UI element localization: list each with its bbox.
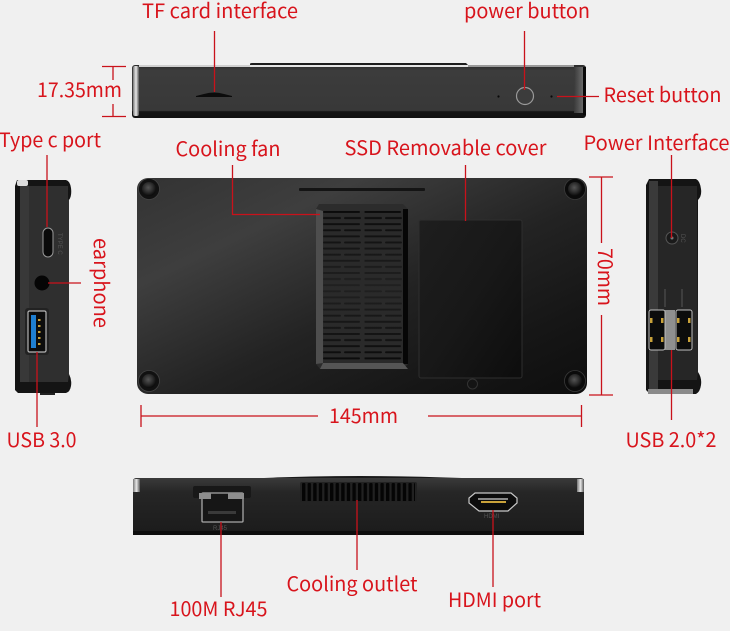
- callout line: TF card: [214, 31, 216, 92]
- callout line: cooling outlet: [356, 500, 358, 570]
- icon: DC power jack: [666, 232, 678, 244]
- fan grille: [316, 204, 408, 369]
- device: bottom view: [137, 178, 587, 394]
- label: Reset button: Reset button: [604, 79, 722, 108]
- foot: top right: [564, 178, 586, 200]
- device: left side view: TYPE C: [56, 233, 62, 255]
- dimension: depth: [589, 177, 613, 395]
- device: right side view: [646, 179, 701, 394]
- icon: USB 2.0 ports: [649, 289, 692, 350]
- vent slot: [299, 188, 425, 191]
- label: HDMI port: HDMI port: [448, 584, 541, 613]
- dimension: height: [102, 66, 126, 116]
- icon: TF card slot: [196, 92, 232, 97]
- SSD removable cover: [419, 220, 522, 389]
- icon: HDMI port: [469, 493, 517, 511]
- icon: reset hole: [550, 95, 553, 98]
- device: right side view: DC: [679, 234, 685, 243]
- device: rear edge view: HDMI: [484, 514, 500, 520]
- icon: indicator hole: [497, 95, 500, 98]
- icon: USB-C port: [43, 228, 53, 257]
- callout line: RJ45: [220, 522, 222, 597]
- device: left side view: [15, 180, 71, 395]
- foot: top left: [138, 178, 160, 200]
- callout line: USB 2.0: [670, 350, 672, 420]
- label: Type c port: Type c port: [0, 124, 101, 153]
- dimension: width: [141, 405, 582, 427]
- callout line: power button: [524, 31, 526, 90]
- label: Power Interface: Power Interface: [584, 127, 730, 156]
- callout line: cooling fan: [232, 165, 320, 214]
- callout line: SSD cover: [464, 165, 466, 221]
- callout line: earphone: [48, 282, 81, 284]
- label: 70mm: 70mm: [592, 248, 621, 306]
- label: USB 2.0*2: USB 2.0*2: [626, 424, 716, 453]
- icon: earphone jack: [34, 276, 50, 290]
- device: top edge view: [132, 63, 586, 118]
- icon: cooling outlet vents: [300, 482, 417, 502]
- callout line: HDMI: [492, 510, 494, 587]
- label: SSD Removable cover: SSD Removable cover: [344, 132, 547, 161]
- foot: bottom right: [564, 370, 586, 392]
- icon: power button: [516, 88, 534, 104]
- callout line: power interface: [670, 155, 672, 238]
- callout line: type c: [46, 155, 48, 227]
- label: 17.35mm: 17.35mm: [37, 74, 122, 103]
- label: Cooling fan: Cooling fan: [176, 133, 280, 162]
- icon: USB 3.0 port: [25, 308, 49, 355]
- label: Cooling outlet: Cooling outlet: [286, 568, 418, 597]
- label: earphone: earphone: [88, 238, 117, 328]
- device: rear edge view: RJ45: [213, 526, 228, 532]
- label: USB 3.0: USB 3.0: [6, 424, 76, 453]
- callout line: reset button: [557, 96, 599, 98]
- icon: RJ45 port: [193, 486, 251, 522]
- device: rear edge view: [133, 476, 584, 535]
- foot: bottom left: [138, 370, 160, 392]
- label: 100M RJ45: 100M RJ45: [170, 593, 268, 622]
- callout line: USB 3.0: [36, 352, 38, 427]
- label: 145mm: 145mm: [329, 400, 398, 429]
